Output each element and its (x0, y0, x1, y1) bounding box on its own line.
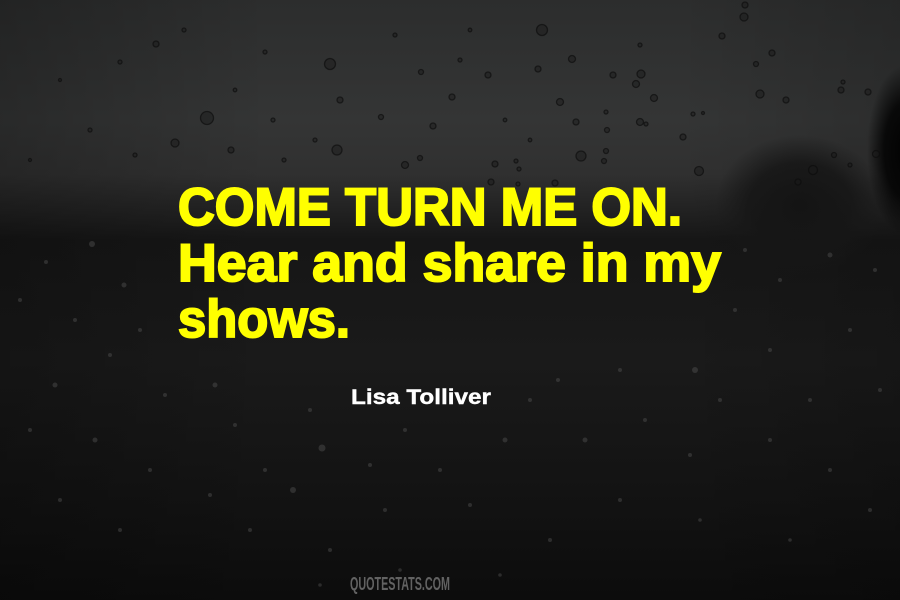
quote line 1: COME TURN ME ON. (178, 178, 682, 237)
raindrops (28, 2, 880, 186)
author name: Lisa Tolliver (351, 386, 491, 409)
watermark: QUOTESTATS.COM (350, 574, 450, 594)
small lit droplets (18, 241, 882, 587)
quote line 2: Hear and share in my (178, 234, 722, 293)
quote line 3: shows. (178, 290, 350, 349)
quote text (178, 178, 722, 349)
